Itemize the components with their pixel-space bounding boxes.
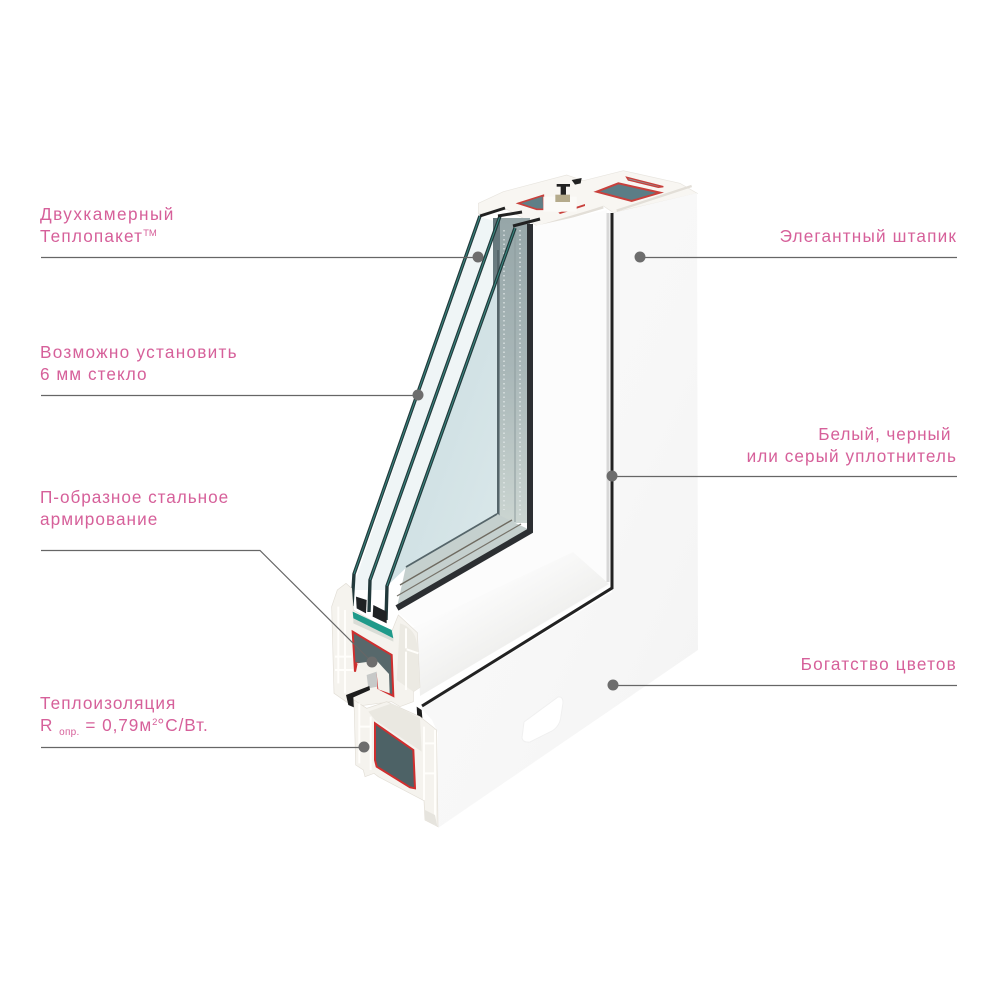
label: thermal insulation bbox=[40, 693, 209, 738]
sash lower bevel bbox=[408, 552, 609, 696]
label: gasket: Белый, черный bbox=[818, 424, 951, 444]
outer frame face bbox=[421, 193, 698, 828]
lower frame section bbox=[354, 700, 438, 827]
leader: glazing bead bbox=[634, 252, 957, 262]
label: glazing bead: Элегантный штапик bbox=[780, 226, 957, 246]
pane 1 bbox=[352, 216, 480, 606]
bottom cross-section of profile bbox=[332, 583, 438, 827]
label: gasket bbox=[747, 424, 957, 466]
teal gasket and spacer bbox=[353, 612, 393, 638]
steel reinforcement with red edge bbox=[353, 632, 393, 696]
label: colours: Богатство цветов bbox=[801, 654, 957, 674]
pane 3 bbox=[386, 228, 515, 620]
frame foot bbox=[425, 810, 437, 827]
sealing gasket bbox=[422, 213, 612, 706]
glass between panes bbox=[352, 217, 515, 590]
spacer strips horizontal bbox=[397, 514, 530, 607]
dotted spacer texture bbox=[504, 230, 520, 515]
top cross-section of profile bbox=[478, 171, 697, 227]
label: thermal insulation: Теплоизоляция bbox=[40, 693, 176, 713]
label: double glazed unit: Двухкамерный bbox=[40, 204, 175, 224]
label: 6 mm glass: 6 мм стекло bbox=[40, 364, 148, 384]
label: 6 mm glass bbox=[40, 342, 238, 384]
label: steel reinforcement: армирование bbox=[40, 509, 158, 529]
leader: 6 mm glass bbox=[41, 390, 424, 400]
inner glass clear area bbox=[387, 228, 515, 586]
glazing unit bbox=[352, 208, 540, 620]
leader: colours bbox=[608, 680, 957, 690]
leader: gasket bbox=[606, 470, 957, 482]
label: double glazed unit: ТеплопакетTM bbox=[40, 226, 157, 246]
spacer strips vertical bbox=[493, 218, 530, 523]
pane top caps bbox=[480, 208, 540, 226]
label: 6 mm glass: Возможно установить bbox=[40, 342, 238, 362]
lower steel reinforcement with red edge bbox=[375, 723, 415, 788]
upper sash section bbox=[332, 583, 420, 707]
sash face bbox=[398, 210, 609, 695]
label: steel reinforcement bbox=[40, 487, 229, 529]
label: thermal insulation: R опр. = 0,79м2°C/Вт. bbox=[40, 715, 209, 738]
label: double glazed unit bbox=[40, 204, 175, 246]
leader: steel reinforcement bbox=[41, 550, 378, 668]
label: steel reinforcement: П-образное стальное bbox=[40, 487, 229, 507]
black gasket between sections bbox=[346, 686, 370, 707]
leader: thermal insulation bbox=[41, 742, 370, 752]
leader: double glazed unit bbox=[41, 252, 484, 262]
pane 2 bbox=[369, 216, 500, 612]
label: gasket: или серый уплотнитель bbox=[747, 446, 957, 466]
black frame seal bbox=[397, 224, 530, 608]
clip cover on frame bbox=[522, 697, 563, 742]
